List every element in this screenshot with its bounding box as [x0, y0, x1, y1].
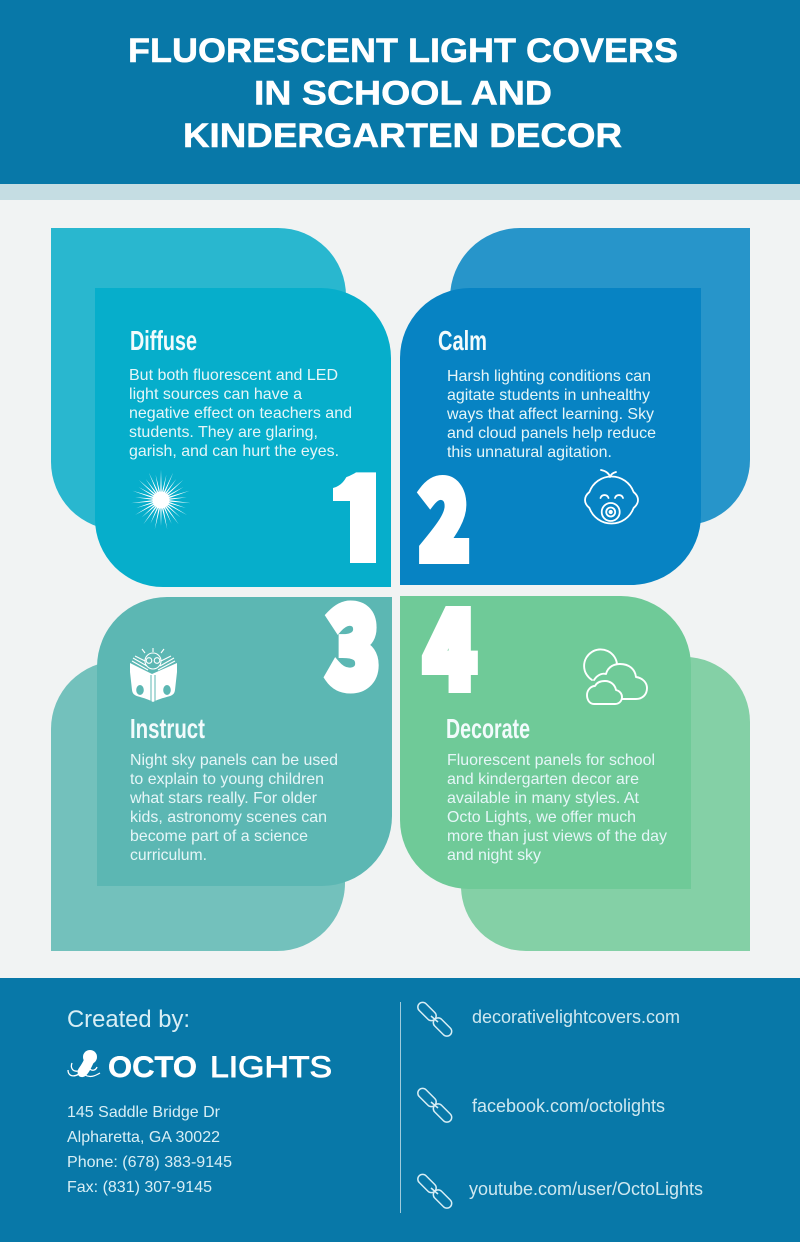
- text: decorate: more than just views of the day: [447, 828, 667, 845]
- text: instruct: [129, 752, 338, 864]
- number 4: 4: [424, 565, 476, 719]
- address: 145 Saddle Bridge Dr: [67, 1104, 221, 1121]
- front leaf: calm: [400, 288, 701, 585]
- logo: Octo Lights: [68, 1050, 332, 1084]
- address: Phone: (678) 383-9145: [67, 1154, 232, 1171]
- link: youtube: [416, 1172, 703, 1210]
- text: decorate: [447, 752, 667, 864]
- text: decorate: available in many styles. At: [447, 790, 640, 807]
- text: calm: and cloud panels help reduce: [447, 425, 656, 442]
- text: calm: this unnatural agitation.: [447, 444, 612, 461]
- panel: diffuse: [51, 228, 401, 604]
- title: FLUORESCENT LIGHT COVERS: [128, 32, 678, 70]
- text: diffuse: negative effect on teachers and: [129, 405, 352, 422]
- link: youtube: youtube.com/user/OctoLights: [469, 1179, 703, 1199]
- icon: baby face: [585, 470, 638, 524]
- text: instruct: Night sky panels can be used: [130, 752, 338, 769]
- text: diffuse: [129, 367, 352, 460]
- header band: [0, 0, 800, 200]
- icon: sunburst: [131, 470, 191, 530]
- heading: Calm: Calm: [438, 325, 487, 356]
- back leaf: diffuse: [51, 228, 346, 530]
- link: facebook: facebook.com/octolights: [472, 1096, 665, 1116]
- front leaf: instruct: [97, 597, 392, 886]
- front leaf: decorate: [400, 596, 691, 889]
- text: diffuse: But both fluorescent and LED: [129, 367, 338, 384]
- address: Fax: (831) 307-9145: [67, 1179, 212, 1196]
- panel: decorate: [400, 565, 750, 951]
- text: calm: Harsh lighting conditions can: [447, 368, 651, 385]
- icon: chain link: [416, 1000, 454, 1038]
- back leaf: decorate: [461, 657, 750, 951]
- text: decorate: Octo Lights, we offer much: [447, 809, 636, 826]
- text: instruct: what stars really. For older: [129, 790, 318, 807]
- number 2: 2: [420, 435, 470, 590]
- number 3: 3: [326, 559, 380, 719]
- address: Alpharetta, GA 30022: [67, 1129, 220, 1146]
- text: decorate: Fluorescent panels for school: [447, 752, 655, 769]
- icon: sun and clouds: [584, 649, 647, 704]
- text: decorate: and night sky: [447, 847, 541, 864]
- text: decorate: and kindergarten decor are: [447, 771, 639, 788]
- front leaf: diffuse: [95, 288, 391, 587]
- text: calm: [446, 368, 656, 461]
- link: website: [416, 1000, 680, 1038]
- text: calm: agitate students in unhealthy: [447, 387, 650, 404]
- icon: chain link: [416, 1172, 454, 1210]
- text: diffuse: garish, and can hurt the eyes.: [129, 443, 339, 460]
- heading: Decorate: Decorate: [446, 713, 530, 744]
- text: instruct: kids, astronomy scenes can: [130, 809, 327, 826]
- number 1: 1: [321, 427, 401, 604]
- address: [67, 1104, 232, 1196]
- text: diffuse: light sources can have a: [129, 386, 302, 403]
- title: IN SCHOOL AND: [254, 74, 552, 112]
- link: website: decorativelightcovers.com: [472, 1007, 680, 1027]
- panel: instruct: [51, 559, 392, 951]
- text: diffuse: students. They are glaring,: [129, 424, 318, 441]
- title: KINDERGARTEN DECOR: [183, 117, 622, 155]
- text: instruct: become part of a science: [130, 828, 308, 845]
- title: [128, 32, 678, 155]
- created by label: Created by:: [67, 1006, 190, 1033]
- icon: child reading book: [130, 648, 177, 702]
- text: instruct: to explain to young children: [130, 771, 324, 788]
- text: instruct: curriculum.: [130, 847, 207, 864]
- text: calm: ways that affect learning. Sky: [446, 406, 654, 423]
- panel: calm: [400, 228, 750, 590]
- footer: [0, 978, 800, 1242]
- logo: Octo Lights: OCTO: [108, 1051, 197, 1084]
- heading: Diffuse: Diffuse: [130, 325, 197, 356]
- icon: octopus: [68, 1050, 100, 1077]
- logo: Octo Lights: LIGHTS: [210, 1051, 332, 1084]
- link: facebook: [416, 1086, 665, 1124]
- back leaf: instruct: [51, 661, 345, 951]
- heading: Instruct: Instruct: [130, 713, 205, 744]
- back leaf: calm: [450, 228, 750, 525]
- footer background: [0, 978, 800, 1242]
- icon: chain link: [416, 1086, 454, 1124]
